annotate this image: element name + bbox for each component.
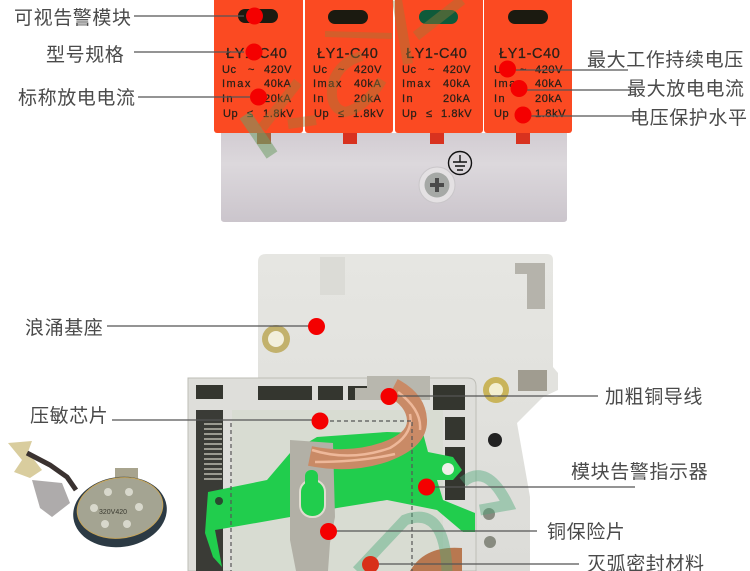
module 2: Uc [313, 64, 328, 76]
module 2: ≤ [338, 108, 345, 120]
faint top recess [320, 257, 345, 295]
base housing [221, 133, 567, 222]
label: 电压保护水平: 电压保护水平 [630, 107, 748, 129]
watermark [245, 0, 462, 155]
module 4: In [494, 93, 506, 105]
copper fuse plate [290, 440, 335, 571]
module 2 [305, 0, 393, 133]
module 3: ~ [428, 64, 435, 76]
module 1: ~ [248, 64, 255, 76]
module 2: Imax [313, 78, 343, 90]
label: 铜保险片: 铜保险片 [547, 521, 625, 543]
icon: ground symbol [448, 152, 472, 174]
icon: brass rivet upper [262, 325, 290, 353]
label: 加粗铜导线: 加粗铜导线 [605, 386, 703, 408]
module 2: 1.8kV [353, 108, 384, 120]
module 1: 40kA [264, 78, 292, 90]
dashed guide lines [231, 421, 412, 571]
module 3: 20kA [443, 93, 471, 105]
panel: top surge protector photo [214, 0, 572, 222]
upper base plate [258, 254, 558, 571]
module 3 [395, 0, 483, 133]
inner housing [188, 378, 476, 571]
inset: varistor chip photo: 320V420 [99, 509, 127, 516]
module 1: Uc [222, 64, 237, 76]
watermark green arcs [357, 476, 508, 571]
module 4: ~ [520, 64, 527, 76]
module 3: 420V [443, 64, 471, 76]
module 1: 420V [264, 64, 292, 76]
module 2: 420V [354, 64, 382, 76]
callout dots [246, 8, 532, 571]
dark window on lever [215, 497, 223, 505]
module 2: 20kA [354, 93, 382, 105]
label: 型号规格: 型号规格 [46, 44, 124, 66]
module 4 [484, 0, 572, 133]
module 3: 40kA [443, 78, 471, 90]
module 4: 40kA [535, 78, 563, 90]
module 1: In [222, 93, 234, 105]
label: 最大放电电流: 最大放电电流 [627, 78, 745, 100]
module 1: 20kA [264, 93, 292, 105]
green alarm indicator lever [205, 432, 475, 567]
module 3: Uc [402, 64, 417, 76]
module 2: ŁY1-C40 [317, 46, 378, 62]
module 4: ŁY1-C40 [499, 46, 560, 62]
module 4: 20kA [535, 93, 563, 105]
lower right rivets [483, 433, 502, 548]
inset: varistor chip photo [8, 441, 171, 553]
module 1: Up [223, 108, 238, 120]
module 2: ~ [338, 64, 345, 76]
module 2: 40kA [354, 78, 382, 90]
thick copper braided wire [310, 388, 417, 459]
module 4: 1.8kV [535, 108, 566, 120]
right grey cutouts [515, 263, 547, 391]
module 4: 420V [535, 64, 563, 76]
module 1: Imax [222, 78, 252, 90]
module 3: 1.8kV [441, 108, 472, 120]
label: 最大工作持续电压: 最大工作持续电压 [587, 49, 744, 71]
module 3: ŁY1-C40 [406, 46, 467, 62]
module 1: ≤ [247, 108, 254, 120]
contact slider [355, 376, 430, 400]
module 4: Imax [494, 78, 524, 90]
module 2: In [313, 93, 325, 105]
module 4: Uc [494, 64, 509, 76]
housing slots [196, 385, 465, 571]
module 3: In [402, 93, 414, 105]
module 1: ŁY1-C40 [226, 46, 287, 62]
label: 浪涌基座: 浪涌基座 [25, 317, 103, 339]
label: 模块告警指示器: 模块告警指示器 [571, 461, 708, 483]
module terminal tabs [257, 133, 530, 144]
label: 可视告警模块: 可视告警模块 [14, 7, 132, 29]
label: 压敏芯片: 压敏芯片 [30, 405, 108, 427]
module 1 [214, 0, 303, 133]
label: 标称放电电流: 标称放电电流 [18, 87, 136, 109]
module 3: ≤ [426, 108, 433, 120]
module 1: 1.8kV [263, 108, 294, 120]
module 2: Up [314, 108, 329, 120]
icon: lever pivot hole [442, 463, 454, 475]
icon: brass rivet lower [483, 377, 509, 403]
module 4: Up [494, 108, 509, 120]
spring [204, 424, 222, 479]
icon: ground screw [419, 167, 455, 203]
panel: lower surge module cutaway photo [188, 254, 558, 571]
lower copper wire [410, 548, 462, 571]
module 3: Imax [402, 78, 432, 90]
module 3: Up [402, 108, 417, 120]
